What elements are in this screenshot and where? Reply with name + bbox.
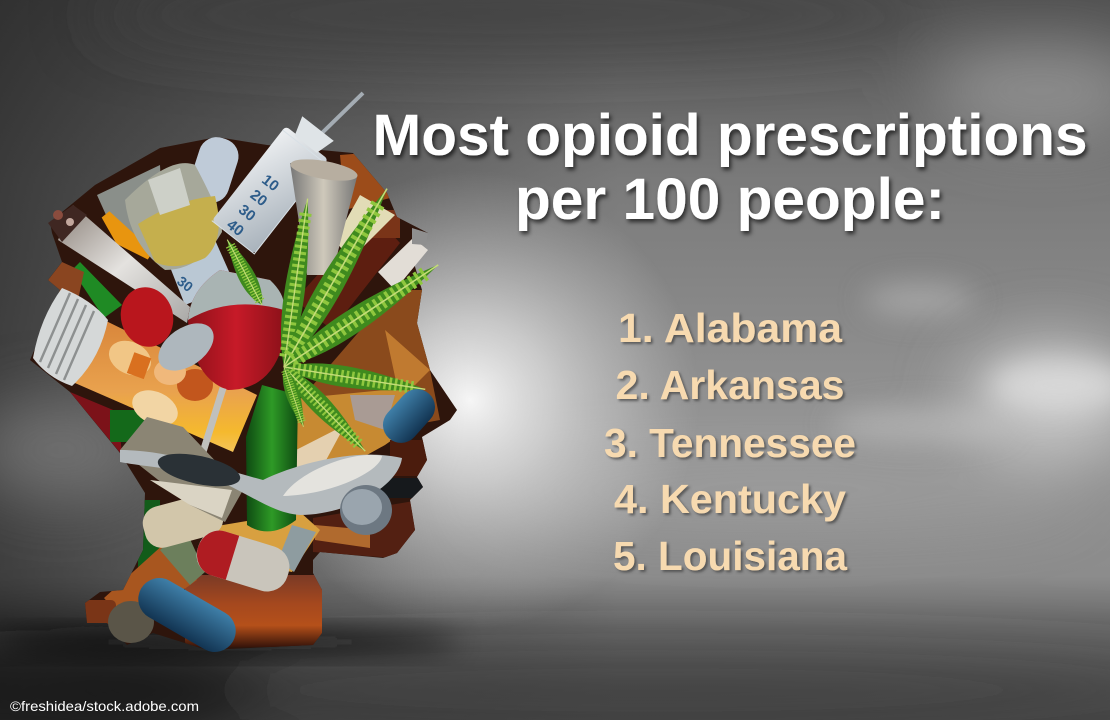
title (372, 103, 1088, 232)
rank 4: 4. Kentucky (614, 476, 846, 522)
glass tumbler (120, 417, 243, 522)
whiskey glass (297, 390, 406, 460)
blue capsule bottom (131, 570, 243, 660)
photo credit: ©freshidea/stock.adobe.com (10, 698, 199, 714)
bottom brown bottle (185, 575, 322, 647)
amber bottle upper right (340, 153, 390, 210)
ranked list of states (604, 305, 856, 579)
red lower back bottle and green slivers (70, 392, 122, 455)
grey disc cap (150, 314, 222, 380)
syringe barrel lower section (168, 240, 235, 305)
head collage of pills, bottles and drinks (30, 92, 457, 652)
"30" on syringe: 30 (174, 273, 196, 295)
left lower bottle (104, 548, 197, 606)
rank 2: 2. Arkansas (616, 362, 844, 408)
green bottle centre (246, 385, 298, 531)
rank 1: 1. Alabama (618, 305, 843, 351)
dark face bottle at nose and lips (390, 440, 427, 476)
chin brown bottle (313, 502, 415, 558)
red wine glass (188, 270, 284, 452)
clear bottle base (108, 601, 154, 643)
rank 3: 3. Tennessee (604, 420, 856, 466)
white pill capsule (185, 132, 243, 208)
title: Most opioid prescriptions (372, 103, 1088, 168)
ground shadow under head (0, 631, 460, 653)
syringe: 10 (258, 171, 282, 195)
right cigarette (378, 228, 428, 290)
syringe: 20 (247, 186, 270, 210)
child-proof cap (33, 288, 108, 386)
glass by the forehead (340, 195, 395, 248)
syringe: 30 (235, 201, 259, 225)
syringe needle (322, 93, 363, 133)
spoon with powder (120, 448, 402, 515)
grey round pill (340, 485, 392, 535)
right face bottle (314, 290, 440, 422)
rank 5: 5. Louisiana (613, 533, 848, 579)
cream tablet (139, 490, 227, 552)
back glass with amber (97, 165, 160, 234)
syringe: 40 (223, 216, 247, 240)
shot glass (290, 163, 357, 275)
syringe (212, 112, 339, 254)
orange pill bottle (33, 288, 257, 452)
blue capsule at nose (376, 382, 442, 450)
neck bottle at back of head (48, 262, 84, 296)
title: per 100 people: (515, 167, 945, 232)
cannabis leaves (220, 183, 445, 458)
red and white capsule (191, 525, 295, 597)
white wine glass (125, 163, 222, 270)
green neck at left (72, 262, 122, 318)
yellow bottle behind capsule (218, 514, 320, 572)
red cap (114, 281, 180, 353)
cigarette (48, 205, 190, 323)
